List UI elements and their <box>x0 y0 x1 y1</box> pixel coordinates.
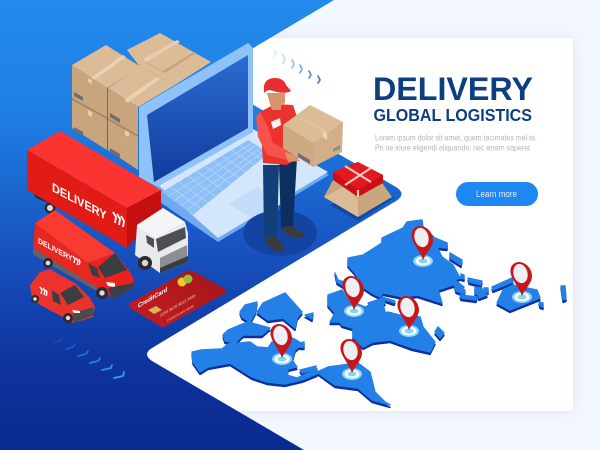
person shadow <box>243 210 317 256</box>
delivery van <box>33 210 133 299</box>
delivery truck: DELIVERY <box>52 180 107 223</box>
open box with red gift <box>324 162 394 221</box>
button: learn more <box>456 182 538 206</box>
credit card: CreditCard <box>138 286 167 310</box>
body text: Pri ne iriure eligendi aliquando, nec errem saperet <box>375 142 531 152</box>
credit card <box>128 270 226 327</box>
small red car <box>30 269 95 323</box>
location pins <box>270 226 532 380</box>
package held by courier <box>283 105 343 167</box>
world map <box>192 220 566 408</box>
delivery truck <box>27 131 188 273</box>
body text: Lorem ipsum dolor sit amet, quem tacimates mel te. <box>375 132 537 142</box>
heading <box>373 71 533 125</box>
white content panel <box>146 38 573 411</box>
credit card: CARDHOLDER NAME <box>167 304 194 323</box>
button: learn more: Learn more <box>476 189 517 200</box>
credit card: 1234 5678 9012 3456 <box>160 292 196 318</box>
body text <box>375 132 537 152</box>
delivery van: DELIVERY <box>38 236 73 264</box>
truck cab <box>135 208 188 273</box>
courier figure <box>256 78 303 252</box>
laptop <box>139 43 329 242</box>
heading: GLOBAL LOGISTICS <box>374 105 532 125</box>
heading: DELIVERY <box>373 71 533 107</box>
keyboard <box>162 140 269 215</box>
blue background shape <box>0 0 402 450</box>
cardboard boxes stack <box>72 33 211 170</box>
arrows on blue background <box>54 338 124 378</box>
arrows around courier <box>274 50 320 83</box>
